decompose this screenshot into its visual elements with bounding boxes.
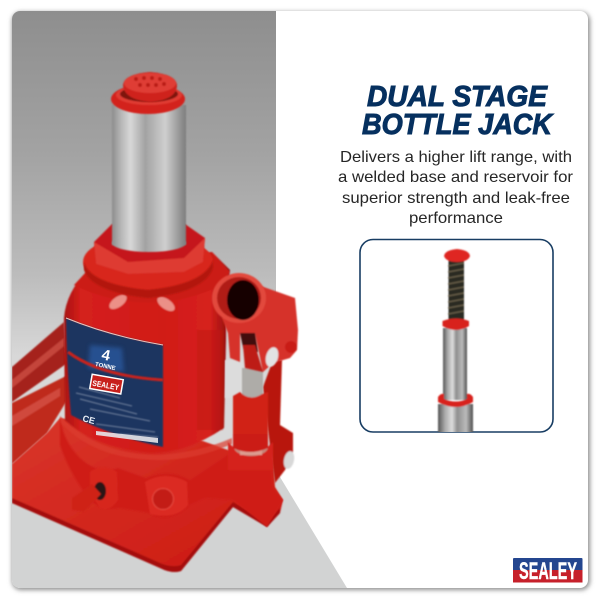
saddle cap (123, 72, 177, 102)
description text: a welded base and reservoir for (338, 169, 574, 186)
screw thread (448, 260, 464, 320)
blue product label: CE (81, 413, 96, 426)
lower red ring (438, 394, 473, 407)
release valve and plug (72, 467, 188, 516)
top cap (444, 249, 470, 262)
collar flange (82, 245, 212, 290)
description text: performance (409, 210, 503, 227)
jack flange and casting (60, 415, 283, 527)
handle socket (212, 273, 266, 323)
jack base plate (12, 418, 283, 572)
pump piston housing (228, 368, 273, 470)
jack body (64, 252, 230, 453)
description text (338, 149, 574, 227)
lower cylinder (438, 404, 473, 434)
blue product label: TONNE (94, 362, 116, 372)
blue product label: 4 (100, 346, 112, 365)
description text: superior strength and leak-free (342, 190, 570, 207)
description text: Delivers a higher lift range, with (340, 149, 572, 166)
upper red ring (442, 318, 469, 330)
photo backdrop (12, 11, 276, 491)
heading (362, 81, 554, 141)
hex nut (94, 224, 205, 274)
steel ram cylinder (112, 105, 186, 245)
pump rod gap (224, 359, 227, 398)
heading: DUAL STAGE (367, 81, 549, 113)
panel: extended ram detail (360, 240, 553, 434)
ram top ring (111, 84, 185, 114)
heading: BOTTLE JACK (362, 109, 554, 141)
inset extended jack (438, 249, 473, 434)
panel: product photo (12, 11, 347, 588)
flange rim (84, 260, 213, 298)
blue product label (66, 318, 163, 447)
ram base (111, 241, 187, 253)
middle cylinder (443, 328, 467, 400)
handle socket arm (222, 285, 298, 372)
inset frame (360, 240, 553, 432)
blue product label: SEALEY (92, 379, 120, 392)
floor surface (12, 476, 347, 588)
rear strut (263, 360, 296, 483)
jack handle tubes (12, 322, 66, 464)
